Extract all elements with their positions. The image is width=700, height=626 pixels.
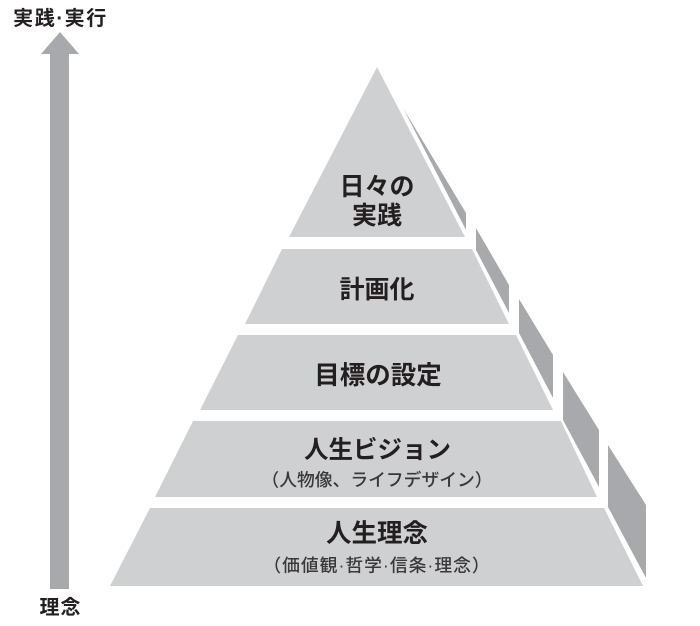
label: practice and execution: 実践·実行: [13, 7, 108, 30]
tier 3: goal setting: [200, 299, 553, 410]
tier 1: daily practice: 日々の: [339, 173, 415, 201]
tier 2: planning: [245, 228, 509, 324]
tier 1: daily practice: [289, 67, 466, 237]
arrow: from philosophy up to practice: [41, 32, 79, 589]
tier 4: life vision: [155, 372, 599, 497]
tier 4: life vision: 人生ビジョン: [304, 436, 451, 464]
label: philosophy: 理念: [40, 596, 82, 619]
tier 5: life philosophy: 人生理念: [326, 520, 428, 548]
tier 3: goal setting: 目標の設定: [314, 362, 442, 390]
tier 2: planning: 計画化: [339, 276, 415, 304]
pyramid: [110, 67, 646, 586]
tier 1: daily practice: 実践: [352, 202, 402, 230]
tier 5: life philosophy: [110, 445, 646, 586]
tier 5: life philosophy: （価値観·哲学·信条·理念）: [263, 556, 491, 576]
tier 4: life vision: （人物像、ライフデザイン）: [261, 469, 493, 490]
